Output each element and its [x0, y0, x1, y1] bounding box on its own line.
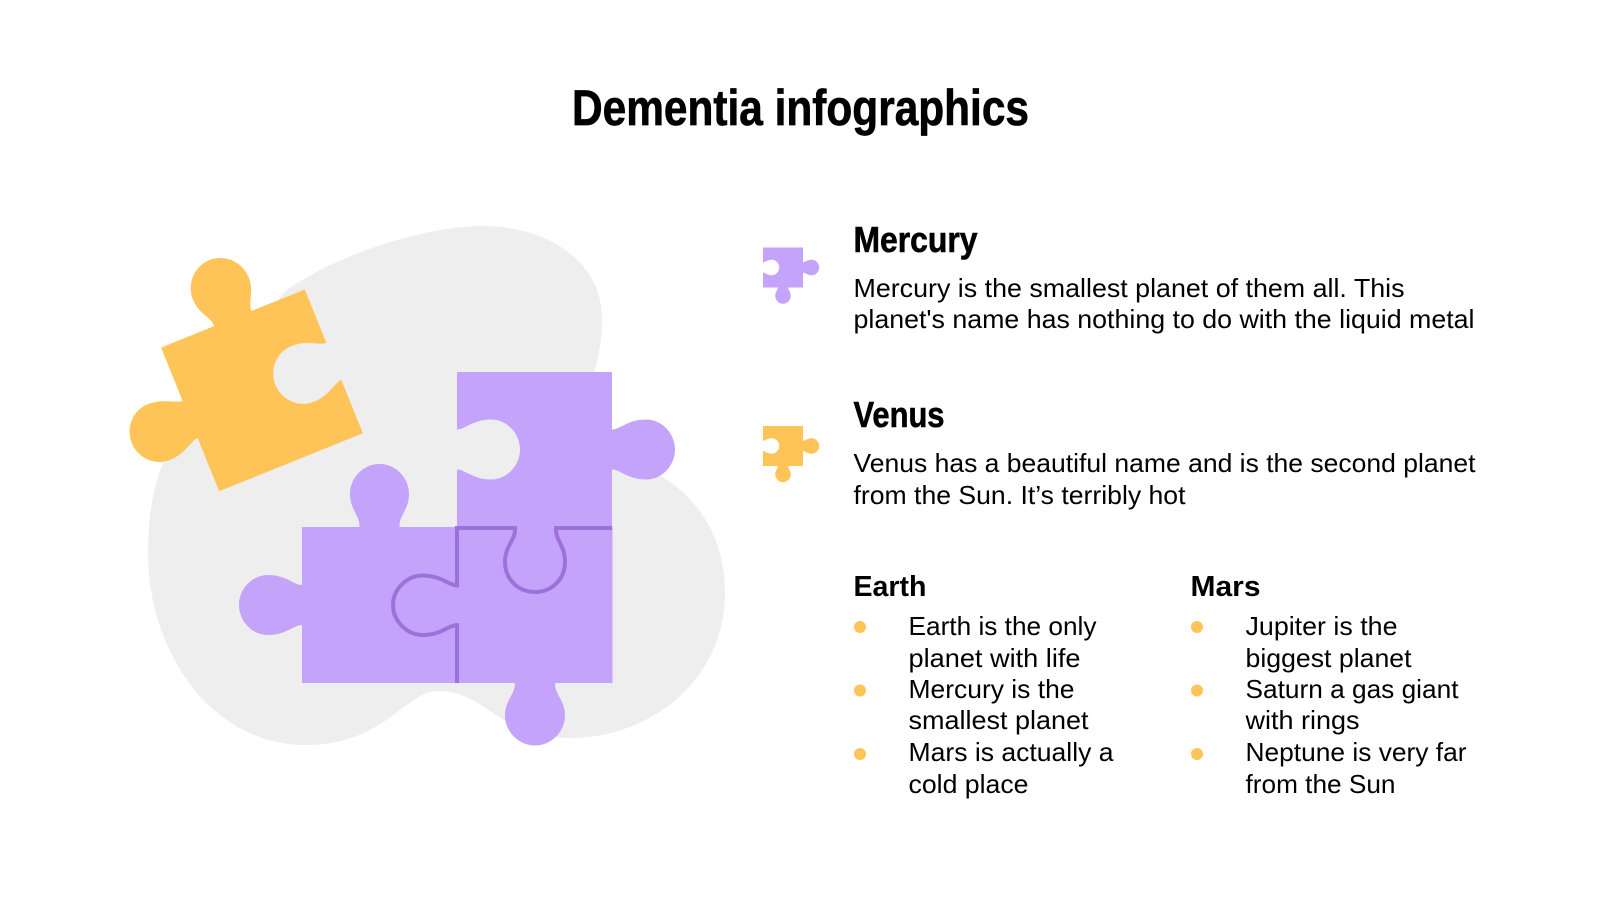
text: Mercury description: Mercury is the smallest planet of them all. This [854, 273, 1404, 303]
heading: Mars: Mars [1190, 571, 1260, 603]
text: Venus description [854, 448, 1476, 510]
bullets [854, 621, 866, 760]
list: Earth items: planet with life [908, 643, 1080, 673]
list: Earth items: Earth is the only [908, 611, 1096, 641]
column: Earth [854, 571, 1114, 799]
icon: yellow puzzle piece [763, 426, 819, 482]
list: Earth items: Mercury is the [908, 674, 1074, 704]
list: Earth items [908, 611, 1114, 799]
text: Mercury description [854, 273, 1474, 334]
list: Earth items: Mars is actually a [908, 737, 1114, 767]
heading: Venus: Venus [854, 394, 944, 435]
list: Earth items: smallest planet [908, 705, 1089, 735]
purple puzzle piece: top right [457, 372, 675, 528]
list: Mars items: with rings [1244, 705, 1360, 735]
heading: Mercury: Mercury [854, 219, 978, 260]
list: Mars items: biggest planet [1246, 643, 1412, 673]
purple puzzle piece: bottom left [239, 464, 458, 683]
block: Mercury [763, 219, 1474, 334]
illustration: puzzle pieces on blob [79, 226, 725, 746]
purple puzzle piece: bottom right [457, 527, 612, 746]
text: Venus description: from the Sun. It’s terribly hot [854, 480, 1186, 510]
bullets [1191, 621, 1203, 760]
icon: purple puzzle piece [763, 248, 819, 304]
list: Mars items: Saturn a gas giant [1246, 674, 1459, 704]
list: Mars items: Jupiter is the [1246, 611, 1398, 641]
text: Venus description: Venus has a beautiful name and is the second planet [854, 448, 1476, 478]
yellow puzzle piece [79, 231, 363, 515]
list: Earth items: cold place [908, 769, 1028, 799]
column: Mars [1190, 571, 1467, 799]
grey background blob [148, 226, 725, 745]
block: Venus [763, 394, 1476, 510]
title: Dementia infographics [572, 80, 1029, 136]
list: Mars items [1244, 611, 1467, 799]
heading: Earth: Earth [854, 571, 926, 603]
text: Mercury description: planet's name has nothing to do with the liquid metal [854, 304, 1474, 334]
puzzle joint outline [393, 528, 612, 683]
list: Mars items: Neptune is very far [1246, 737, 1467, 767]
list: Mars items: from the Sun [1246, 769, 1396, 799]
